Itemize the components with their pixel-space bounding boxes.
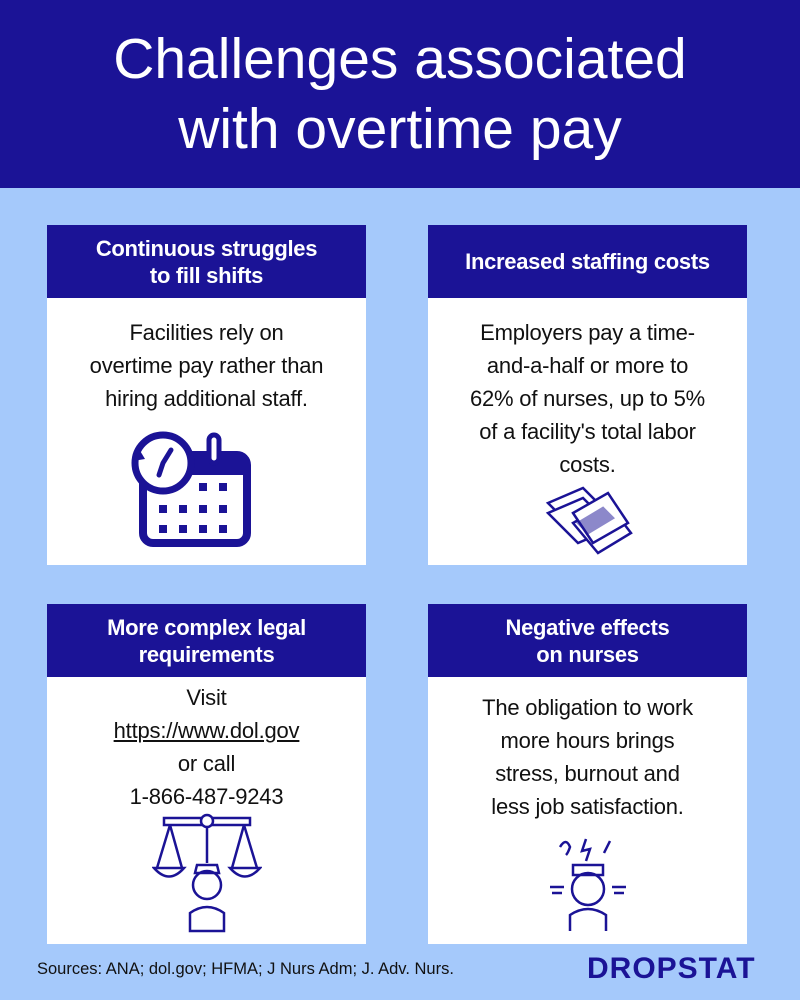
text block: more hours brings [501, 728, 674, 753]
text block [114, 685, 300, 809]
text block: overtime pay rather than [90, 353, 323, 378]
text block [90, 320, 323, 411]
sources: Sources: ANA; dol.gov; HFMA; J Nurs Adm; J. Adv. Nurs. [37, 960, 454, 978]
heading: to fill shifts [150, 262, 263, 288]
panel: negative effects [428, 604, 747, 944]
text block: https://www.dol.gov [114, 718, 299, 743]
heading: Negative effects [506, 614, 669, 640]
title: with overtime pay [178, 97, 622, 161]
text block: Facilities rely on [129, 320, 284, 345]
heading: Continuous struggles [96, 236, 317, 260]
text block: 1-866-487-9243 [130, 784, 283, 809]
text block: stress, burnout and [495, 761, 680, 786]
heading [47, 604, 366, 677]
text block [482, 695, 694, 819]
icon: money [546, 486, 633, 555]
heading: requirements [139, 642, 274, 666]
text block: The obligation to work [482, 695, 693, 720]
heading [47, 225, 366, 298]
panel: staffing costs [428, 225, 747, 565]
text block: costs. [559, 452, 616, 477]
text block: Employers pay a time- [480, 320, 695, 345]
text block: and-a-half or more to [487, 353, 688, 378]
icon: scales with nurse [152, 814, 262, 932]
title: Challenges associated [113, 27, 687, 91]
text block: Visit [186, 685, 227, 710]
panel: legal requirements [47, 604, 366, 944]
heading [428, 225, 747, 298]
title [0, 0, 800, 188]
icon: stressed nurse [550, 838, 626, 931]
heading: More complex legal [107, 614, 306, 640]
heading: on nurses [536, 642, 639, 666]
text block: hiring additional staff. [105, 386, 308, 411]
panel: continuous struggles [47, 225, 366, 565]
icon: clock calendar [132, 432, 251, 547]
heading: Increased staffing costs [465, 249, 710, 274]
text block: of a facility's total labor [479, 419, 696, 444]
text block: less job satisfaction. [491, 794, 684, 819]
text block: 62% of nurses, up to 5% [470, 386, 705, 411]
text block [470, 320, 705, 477]
heading [428, 604, 747, 677]
text block: or call [178, 751, 235, 776]
logo: DROPSTAT [587, 952, 756, 985]
